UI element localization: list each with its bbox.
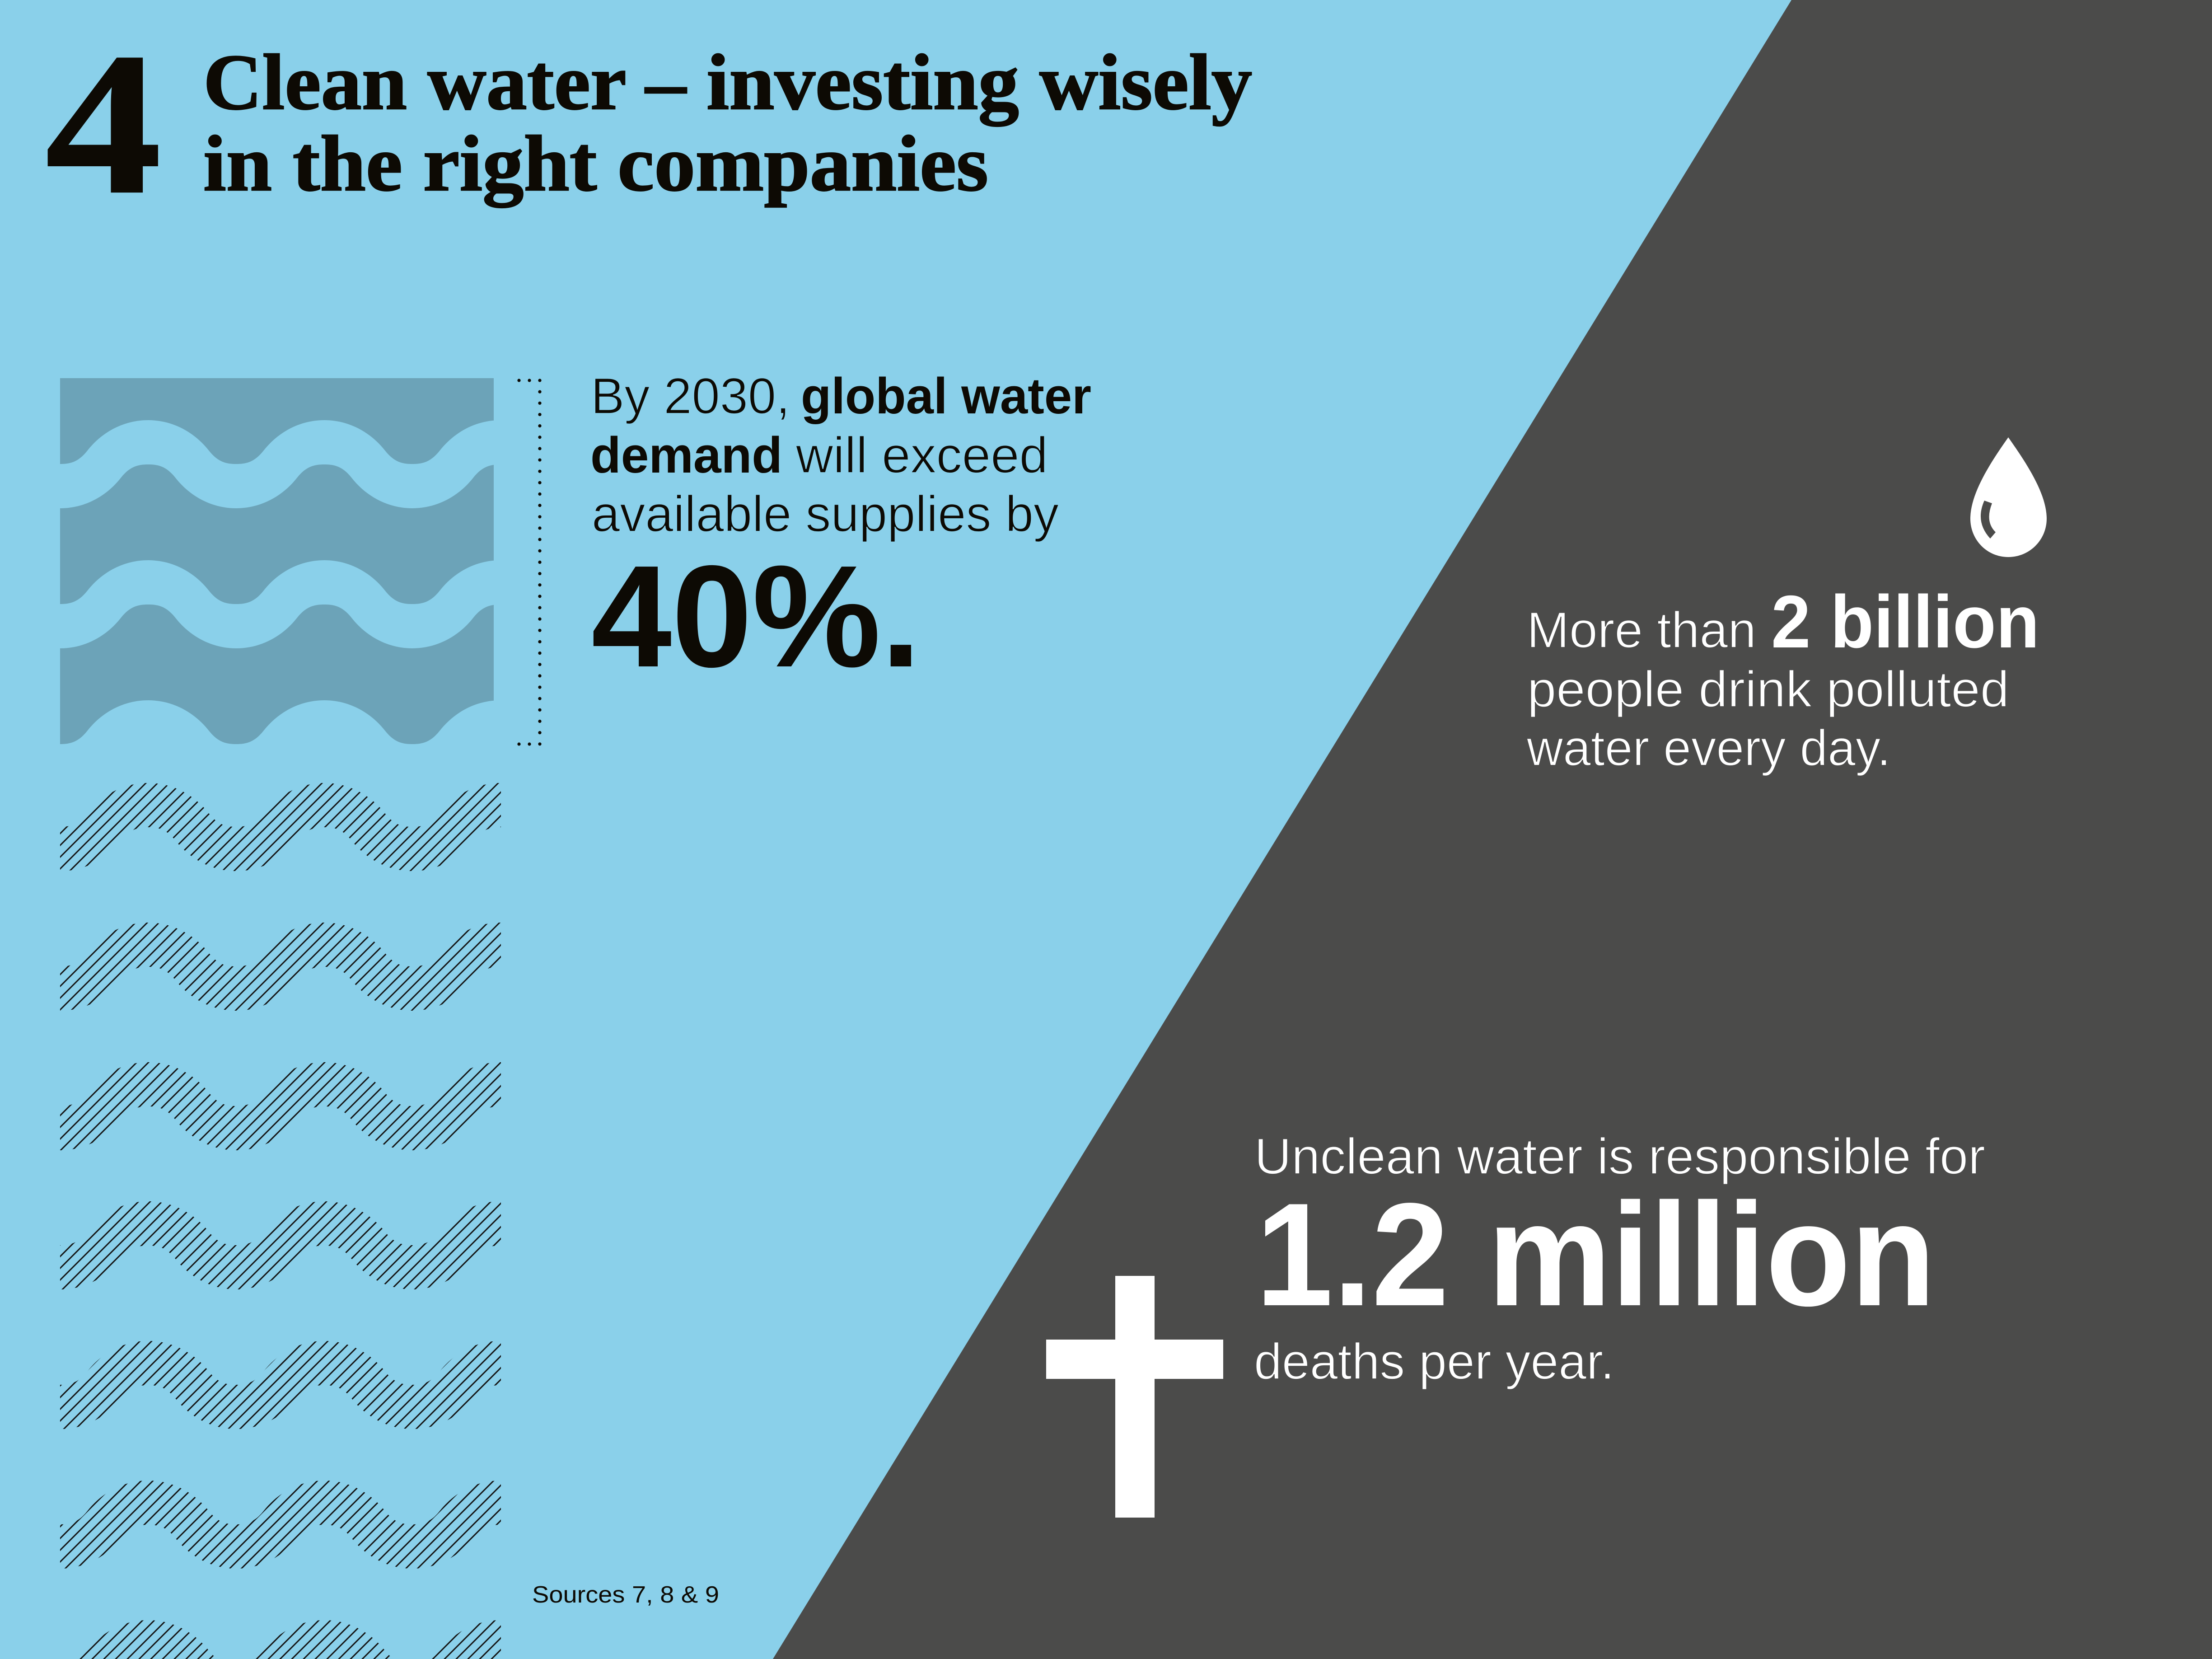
text block: global water demand (590, 368, 1091, 698)
wave band 3 (60, 700, 589, 788)
text block: 2 billion people (1526, 580, 2039, 776)
dotted bracket (517, 379, 540, 746)
chart: filled water waves (available supply) (60, 378, 589, 788)
sources note: Sources 7, 8 & 9 (532, 1582, 719, 1608)
hatched wave row 5 (60, 1341, 501, 1429)
line 1 bold: global water (801, 368, 1091, 424)
icon: water drop (1970, 437, 2047, 557)
hatched wave row 2 (60, 923, 501, 1011)
line 1 regular: By 2030, (591, 368, 790, 424)
section number: 4 (45, 11, 162, 236)
line 2 bold: demand (590, 427, 782, 483)
wave band 1 (60, 420, 589, 508)
water block (60, 378, 494, 744)
hatched wave row 6 (60, 1481, 501, 1569)
wave band 2 (60, 560, 589, 648)
line 3: water every day. (1526, 720, 1891, 776)
hatched wave row 3 (60, 1062, 501, 1150)
line 3: deaths per year. (1254, 1333, 1614, 1390)
text block: 1.2 million deaths (1254, 1128, 1985, 1390)
big figure 40%: 40%. (591, 535, 921, 698)
line 1 bold figure: 2 billion (1771, 580, 2039, 663)
panel: dark diagonal (773, 0, 2212, 1659)
line 1 regular: More than (1527, 602, 1756, 658)
line 1: Unclean water is responsible for (1254, 1128, 1985, 1185)
line 3: available supplies by (592, 486, 1059, 542)
title line 2: in the right companies (203, 120, 988, 208)
line 2: people drink polluted (1527, 661, 2009, 717)
chart: hatched waves (polluted water) (60, 783, 501, 1659)
title line 1: Clean water – investing wisely (203, 38, 1252, 127)
title (203, 38, 1252, 208)
hatched wave row 7 (60, 1620, 589, 1659)
big figure 1.2 million: 1.2 million (1256, 1172, 1936, 1336)
hatched wave row 1 (60, 783, 501, 871)
line 2 regular: will exceed (795, 427, 1048, 483)
icon: cross (1046, 1276, 1223, 1518)
hatched wave row 4 (60, 1201, 501, 1289)
